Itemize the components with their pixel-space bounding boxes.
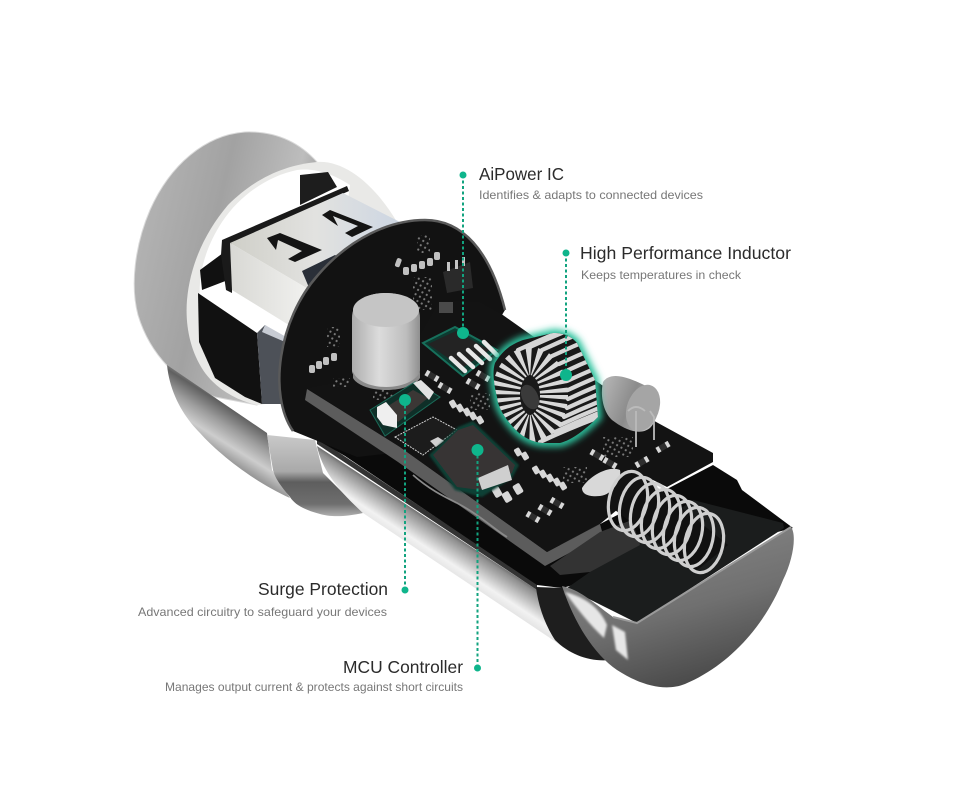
lower metal insert bbox=[257, 325, 292, 404]
lower black block bbox=[198, 293, 262, 404]
main circuit board edge bbox=[305, 389, 603, 566]
small capacitor body bbox=[602, 376, 658, 432]
black strap bbox=[200, 253, 228, 290]
silver collar: ring section bbox=[267, 435, 363, 516]
description: Keeps temperatures in check bbox=[581, 268, 742, 282]
right board chips bbox=[589, 449, 605, 461]
toroid hole bbox=[521, 384, 539, 410]
large capacitor bbox=[352, 293, 420, 390]
spring coils bbox=[603, 468, 729, 576]
USB slot one bbox=[267, 233, 322, 262]
spring plate bbox=[582, 469, 620, 496]
metal frame bbox=[221, 186, 349, 293]
teal glow bbox=[494, 333, 598, 443]
capacitor base bbox=[353, 372, 420, 390]
USB shell side bbox=[300, 250, 365, 330]
USB shell front face bbox=[230, 243, 310, 335]
SMD row one bbox=[448, 399, 458, 409]
AiPower IC chip bbox=[423, 327, 497, 376]
teal glow trace bbox=[423, 327, 497, 376]
dark port opening bbox=[302, 255, 350, 290]
toroid base bbox=[494, 333, 598, 443]
dot grids bbox=[470, 393, 633, 483]
toroid windings bbox=[494, 333, 598, 443]
disc dot grids bbox=[327, 235, 432, 400]
bottom dot bbox=[474, 664, 481, 672]
SMD group near MCU bbox=[491, 486, 503, 498]
inductor dot bbox=[560, 369, 572, 381]
callout: MCU Controller bbox=[165, 444, 484, 694]
connector line bbox=[565, 253, 567, 375]
top dot bbox=[460, 172, 466, 178]
end cap floor bbox=[567, 500, 784, 623]
coil spring bbox=[603, 468, 729, 576]
white tab bbox=[430, 437, 444, 447]
metal insert highlight bbox=[262, 325, 292, 345]
SMD row two bbox=[513, 447, 523, 457]
rear cap opening bbox=[200, 170, 350, 397]
disc small block bbox=[439, 302, 453, 313]
end cap half disc bbox=[562, 527, 794, 687]
chip body bbox=[428, 331, 490, 368]
silver collar: long section bbox=[167, 365, 290, 498]
description: Identifies & adapts to connected devices bbox=[479, 188, 703, 202]
top dot bbox=[562, 250, 570, 256]
callout: High Performance Inductor bbox=[560, 243, 791, 381]
radial windings bbox=[506, 361, 554, 429]
small board components bbox=[424, 370, 671, 523]
chip dot bbox=[457, 327, 469, 339]
teal surround bbox=[429, 421, 519, 497]
MCU controller chip bbox=[429, 421, 519, 497]
silver barrel body bbox=[317, 446, 570, 652]
disc components bbox=[309, 235, 473, 400]
callout: Surge Protection bbox=[138, 394, 411, 619]
USB shell top face bbox=[230, 193, 400, 290]
chip outline bbox=[395, 417, 457, 455]
chip pins bbox=[451, 342, 497, 371]
lower resistors bbox=[525, 511, 541, 523]
disc chips bbox=[309, 252, 440, 373]
black wire bbox=[413, 475, 507, 537]
chip dot bbox=[472, 444, 484, 456]
white terminal left bbox=[377, 402, 397, 428]
rear cap: pale inner ring bbox=[187, 162, 397, 405]
chip body bbox=[433, 425, 515, 490]
small capacitor bbox=[602, 376, 666, 447]
USB port assembly bbox=[198, 172, 400, 404]
outer bands bbox=[516, 333, 598, 443]
end cap highlights bbox=[565, 592, 628, 660]
disc rim bbox=[279, 220, 505, 431]
connector tab bbox=[300, 172, 337, 205]
charger illustration bbox=[134, 132, 794, 687]
round circuit disc bbox=[279, 220, 505, 457]
heading: AiPower IC bbox=[479, 164, 564, 184]
metal tab bbox=[478, 465, 512, 490]
barrel dark top edge bbox=[317, 438, 537, 590]
capacitor body bbox=[352, 293, 420, 388]
disc pins bbox=[447, 257, 465, 271]
bottom dot bbox=[402, 586, 408, 594]
USB slot two bbox=[322, 210, 373, 237]
capacitor top bbox=[353, 293, 419, 327]
rear cap: silver cylinder bbox=[134, 132, 317, 405]
teal surround bbox=[370, 382, 440, 436]
board end pad bbox=[550, 520, 640, 575]
capacitor legs bbox=[628, 407, 654, 447]
outlined chip bbox=[395, 417, 457, 455]
small capacitor end bbox=[620, 380, 666, 436]
main circuit board bbox=[307, 300, 713, 552]
description: Advanced circuitry to safeguard your devices bbox=[138, 605, 387, 619]
heading: High Performance Inductor bbox=[580, 243, 791, 263]
end cap rim bbox=[613, 527, 791, 623]
dark housing interior bbox=[300, 400, 793, 588]
connector line bbox=[462, 175, 464, 333]
gap between cap and collar bbox=[225, 403, 292, 433]
connector line bbox=[476, 450, 478, 668]
white terminal right bbox=[413, 380, 434, 400]
heading: Surge Protection bbox=[258, 579, 388, 599]
spring shadow bbox=[615, 482, 728, 572]
disc component block bbox=[443, 262, 473, 293]
heading: MCU Controller bbox=[343, 657, 463, 677]
chip body bbox=[385, 390, 428, 422]
callout: AiPower IC bbox=[457, 164, 703, 339]
high performance inductor toroid bbox=[484, 324, 607, 452]
surge protection component bbox=[370, 380, 440, 436]
connector line bbox=[404, 400, 406, 590]
component dot bbox=[399, 394, 411, 406]
upper chips bbox=[424, 370, 440, 382]
dark band bbox=[536, 587, 610, 660]
description: Manages output current & protects against short circuits bbox=[165, 680, 463, 694]
